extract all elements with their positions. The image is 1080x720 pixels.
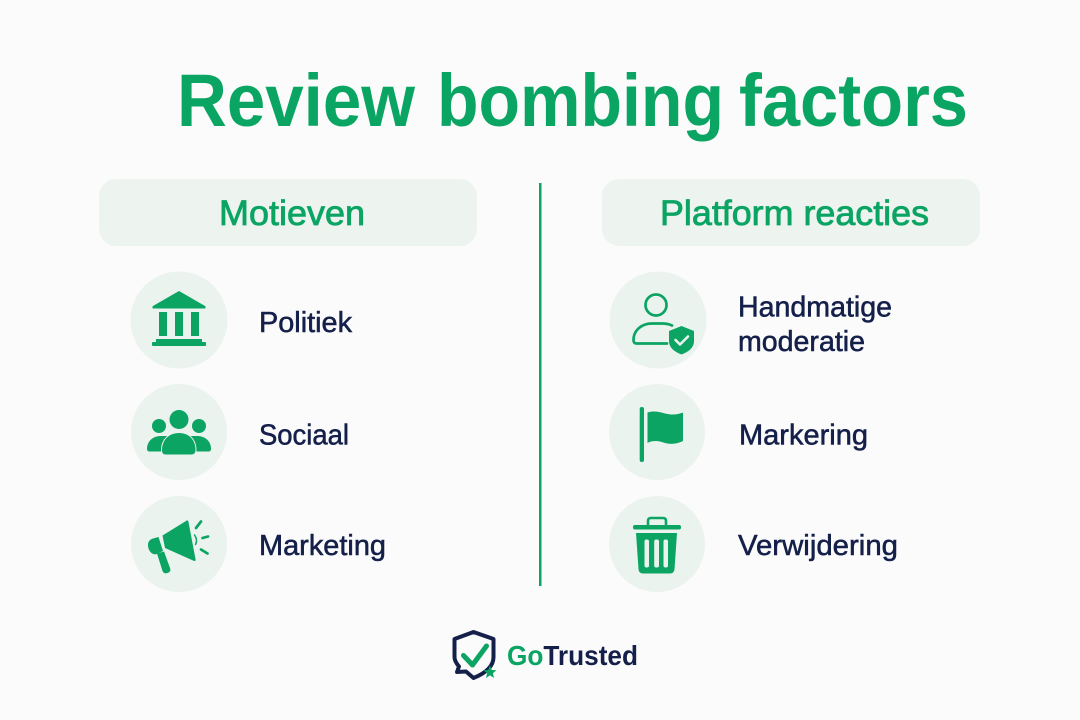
heading: motieven — [99, 179, 477, 246]
title: bombing — [437, 59, 724, 142]
item: politiek — [130, 272, 352, 368]
heading: platform reacties: Platform reacties — [660, 194, 929, 233]
heading: platform reacties — [602, 179, 980, 246]
item: politiek: Politiek — [259, 307, 352, 339]
icon: user with shield — [634, 294, 694, 354]
icon: megaphone — [148, 520, 208, 573]
title — [177, 59, 968, 142]
divider line — [539, 183, 542, 586]
item: verwijdering — [609, 496, 898, 592]
icon: shield with check and star — [454, 632, 496, 678]
icon: government building — [152, 292, 206, 346]
item: marketing — [131, 496, 386, 592]
label: handmatige moderatie: moderatie — [738, 326, 865, 358]
item: verwijdering: Verwijdering — [738, 530, 898, 562]
panel: platform reacties — [602, 179, 980, 592]
title: Review — [177, 59, 415, 142]
title: factors — [739, 59, 968, 142]
label: handmatige moderatie — [738, 292, 892, 358]
item: markering — [609, 384, 868, 480]
item: sociaal: Sociaal — [259, 420, 349, 452]
wordmark: GoTrusted — [507, 640, 638, 671]
item: handmatige moderatie — [610, 272, 892, 368]
panel: motieven — [99, 179, 477, 592]
label: handmatige moderatie: Handmatige — [738, 292, 892, 324]
icon: flag — [640, 407, 683, 462]
heading: motieven: Motieven — [219, 194, 365, 233]
icon: people group — [147, 410, 211, 454]
item: marketing: Marketing — [259, 530, 386, 562]
icon: trash can — [633, 518, 681, 574]
item: sociaal — [131, 384, 349, 480]
item: markering: Markering — [739, 420, 868, 452]
logo: GoTrusted — [454, 632, 638, 678]
